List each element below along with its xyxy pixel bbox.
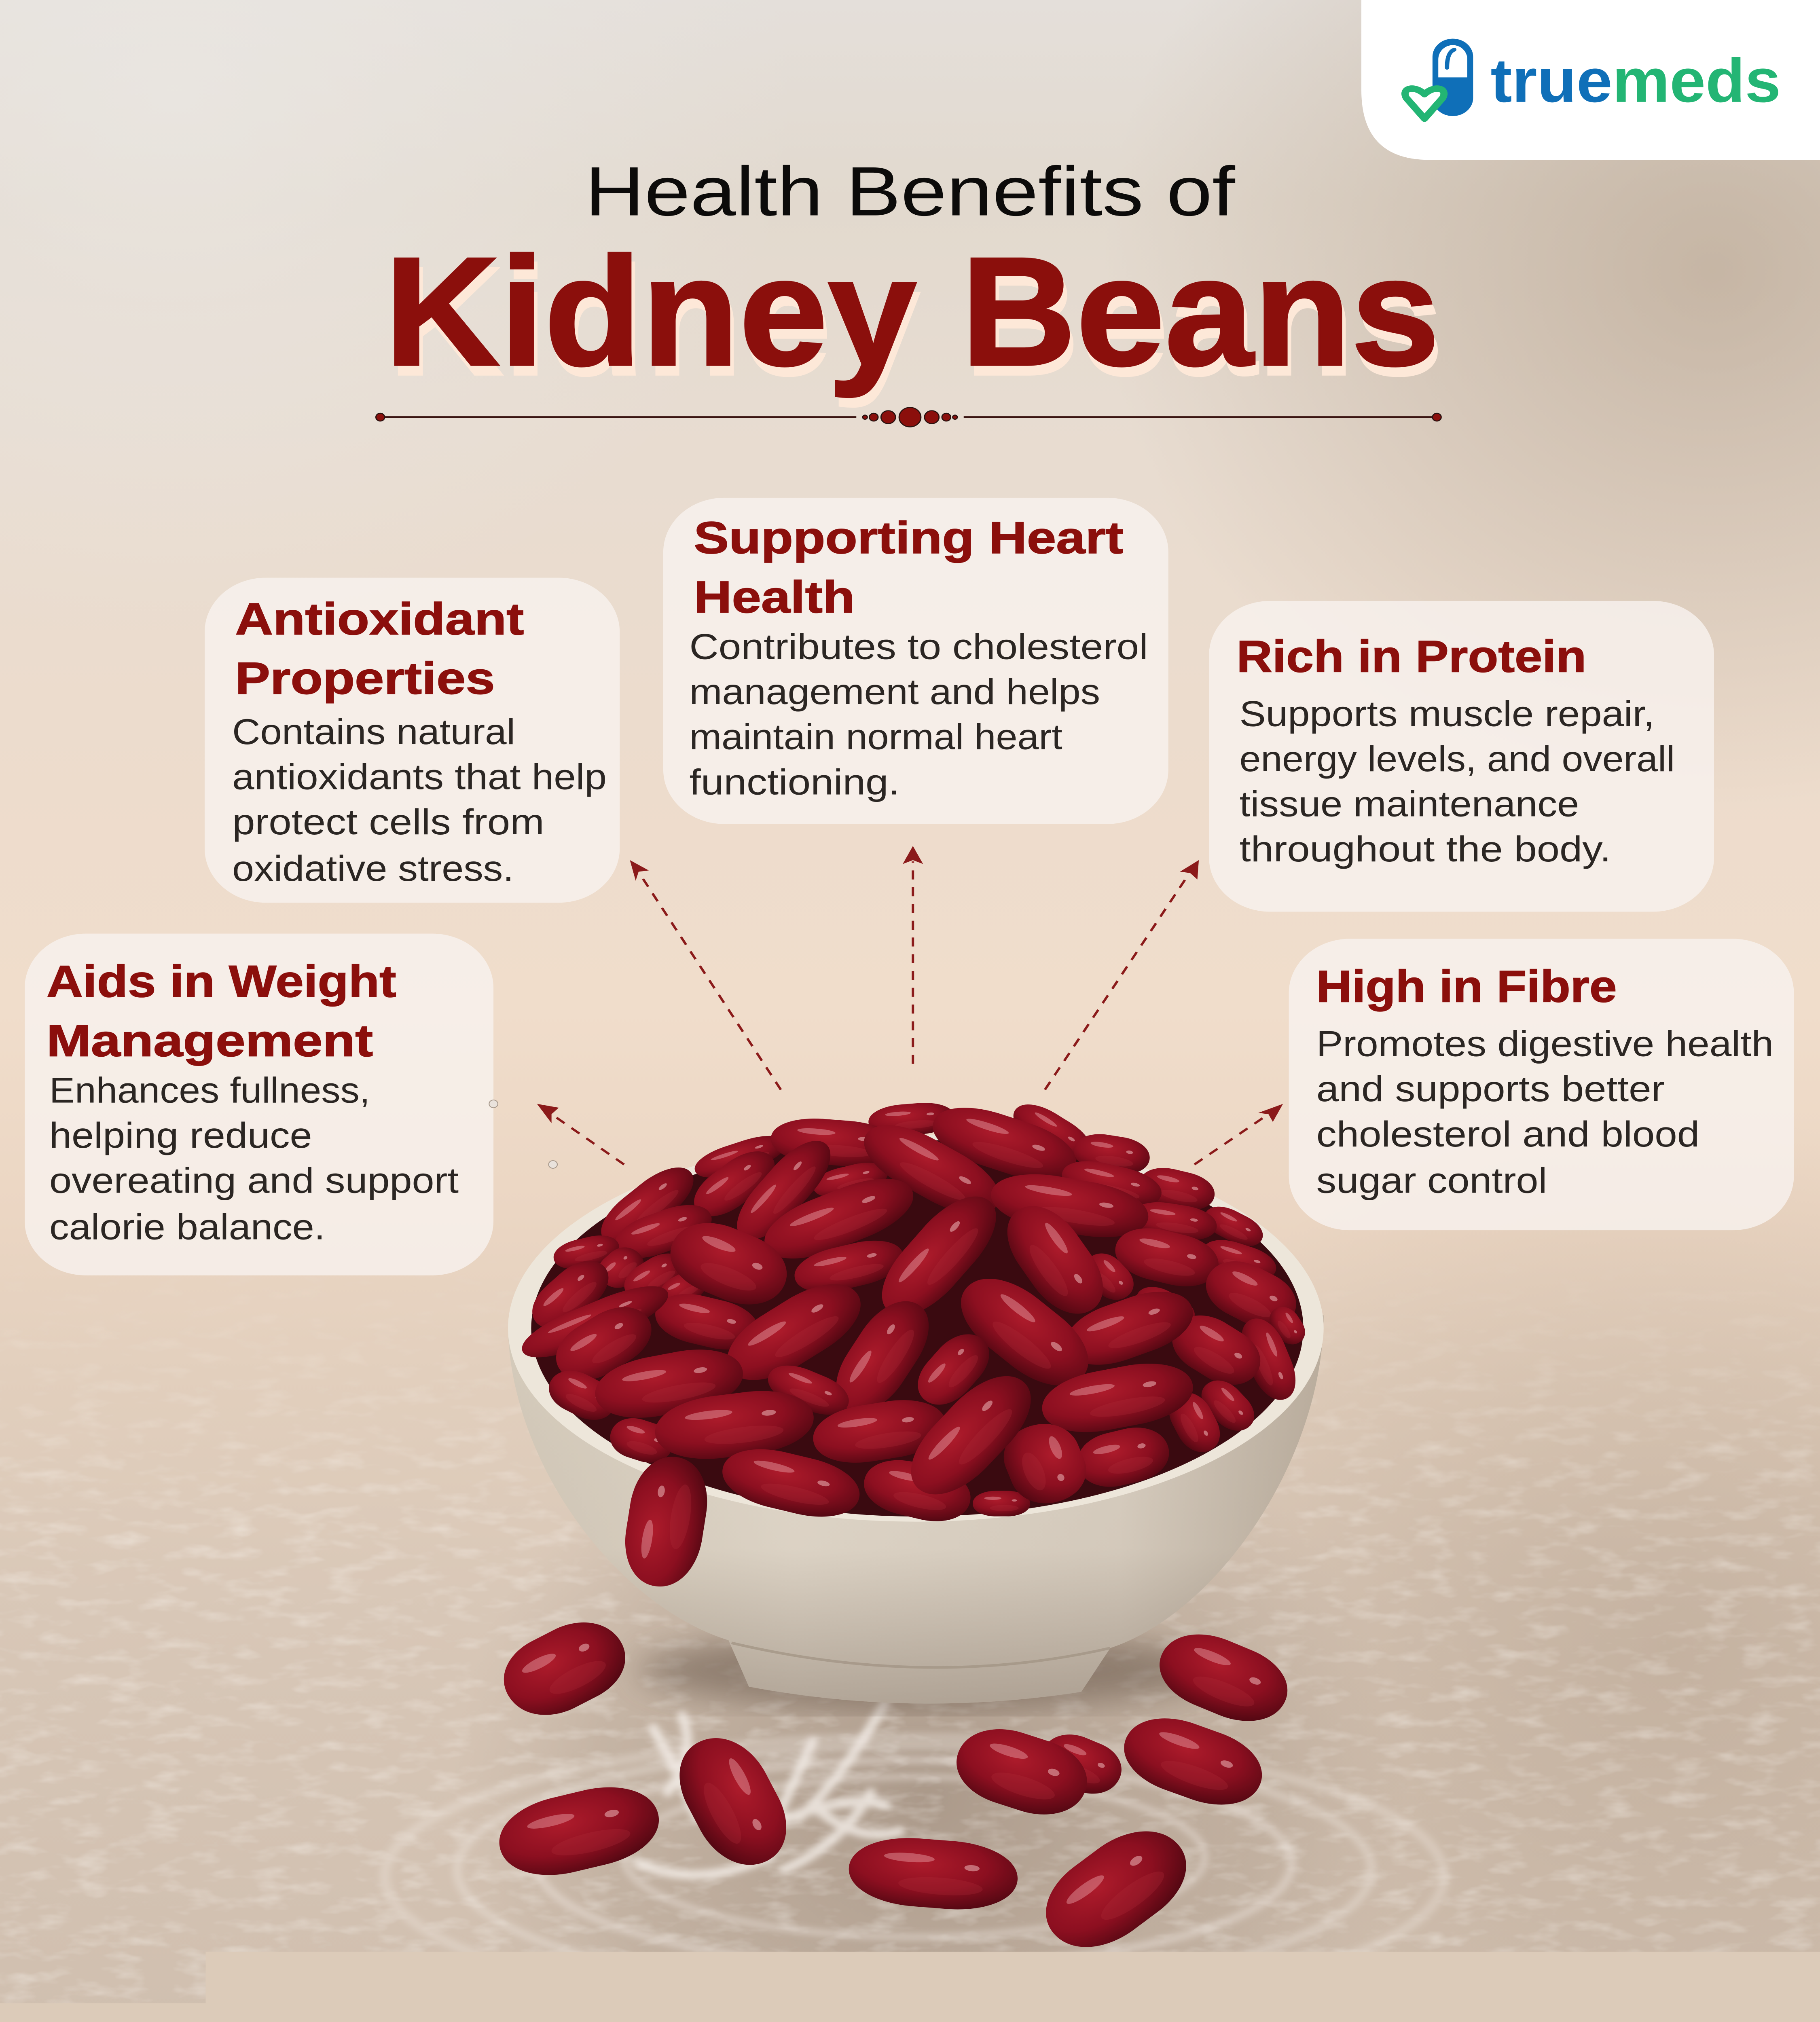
panel: Aids in Weight Management: Enhances fullness, <box>49 1070 370 1110</box>
panel: Supporting Heart Health <box>663 498 1168 824</box>
arrow: to Antioxidant Properties <box>630 860 781 1090</box>
panel: Supporting Heart Health: Supporting Heart <box>694 512 1124 563</box>
panel: Antioxidant Properties <box>205 578 620 903</box>
bowl body <box>508 1135 1324 1704</box>
panel: Supporting Heart Health: functioning. <box>690 762 900 802</box>
logo wordmark: truemeds <box>1490 46 1781 115</box>
panel: Supporting Heart Health: Health <box>694 572 855 622</box>
panel: Supporting Heart Health: Contributes to cholesterol <box>690 627 1148 667</box>
panel: Supporting Heart Health: maintain normal heart <box>690 717 1062 757</box>
panel: High in Fibre <box>1289 939 1794 1230</box>
panel: Antioxidant Properties: Properties <box>235 653 495 704</box>
panel: Antioxidant Properties: Contains natural <box>232 712 515 752</box>
panel: Aids in Weight Management <box>25 934 493 1275</box>
bowl of kidney beans <box>508 1096 1324 1709</box>
title: Health Benefits of <box>585 152 1236 230</box>
water droplets <box>489 1100 557 1168</box>
icon: capsule with heart <box>1405 39 1473 118</box>
title <box>385 152 1443 408</box>
panel: Aids in Weight Management: Aids in Weight <box>47 956 396 1007</box>
panel: Aids in Weight Management: helping reduce <box>49 1115 312 1156</box>
title: Kidney Beans <box>388 235 1443 408</box>
beans in bowl <box>514 1096 1311 1529</box>
panel: Rich in Protein: tissue maintenance <box>1240 784 1579 824</box>
title: Kidney Beans <box>385 225 1440 399</box>
panel: Rich in Protein: energy levels, and overall <box>1240 739 1675 779</box>
arrow: to Rich in Protein <box>1045 860 1199 1090</box>
panel: Antioxidant Properties: antioxidants that help <box>232 757 607 797</box>
panel: High in Fibre: sugar control <box>1316 1161 1547 1201</box>
panel: High in Fibre: Promotes digestive health <box>1316 1024 1773 1064</box>
panel: Rich in Protein: throughout the body. <box>1240 829 1611 869</box>
scattered kidney beans in water <box>488 1607 1301 1966</box>
panel: High in Fibre: cholesterol and blood <box>1316 1114 1699 1155</box>
arrow: to Aids in Weight Management <box>537 1104 624 1164</box>
panel: Aids in Weight Management: overeating and support <box>49 1161 459 1201</box>
panel: Antioxidant Properties: Antioxidant <box>235 594 524 644</box>
arrow: to Supporting Heart Health <box>903 846 923 1064</box>
panel: High in Fibre: and supports better <box>1316 1069 1665 1109</box>
panel: Antioxidant Properties: oxidative stress. <box>232 848 514 889</box>
panel: Rich in Protein: Rich in Protein <box>1236 631 1586 682</box>
water ripples and splash <box>385 1702 1444 2016</box>
panel: Aids in Weight Management: Management <box>47 1015 373 1066</box>
panel: Rich in Protein: Supports muscle repair, <box>1240 694 1655 734</box>
panel: Antioxidant Properties: protect cells from <box>232 802 544 842</box>
divider ornament <box>376 408 1441 427</box>
panel: Rich in Protein <box>1209 601 1714 912</box>
logo panel <box>1361 0 1820 160</box>
panel: Supporting Heart Health: management and helps <box>690 672 1100 712</box>
panel: Aids in Weight Management: calorie balance. <box>49 1207 325 1247</box>
panel: High in Fibre: High in Fibre <box>1316 961 1617 1012</box>
arrow: to High in Fibre <box>1194 1104 1283 1164</box>
hanging bean <box>618 1452 714 1591</box>
